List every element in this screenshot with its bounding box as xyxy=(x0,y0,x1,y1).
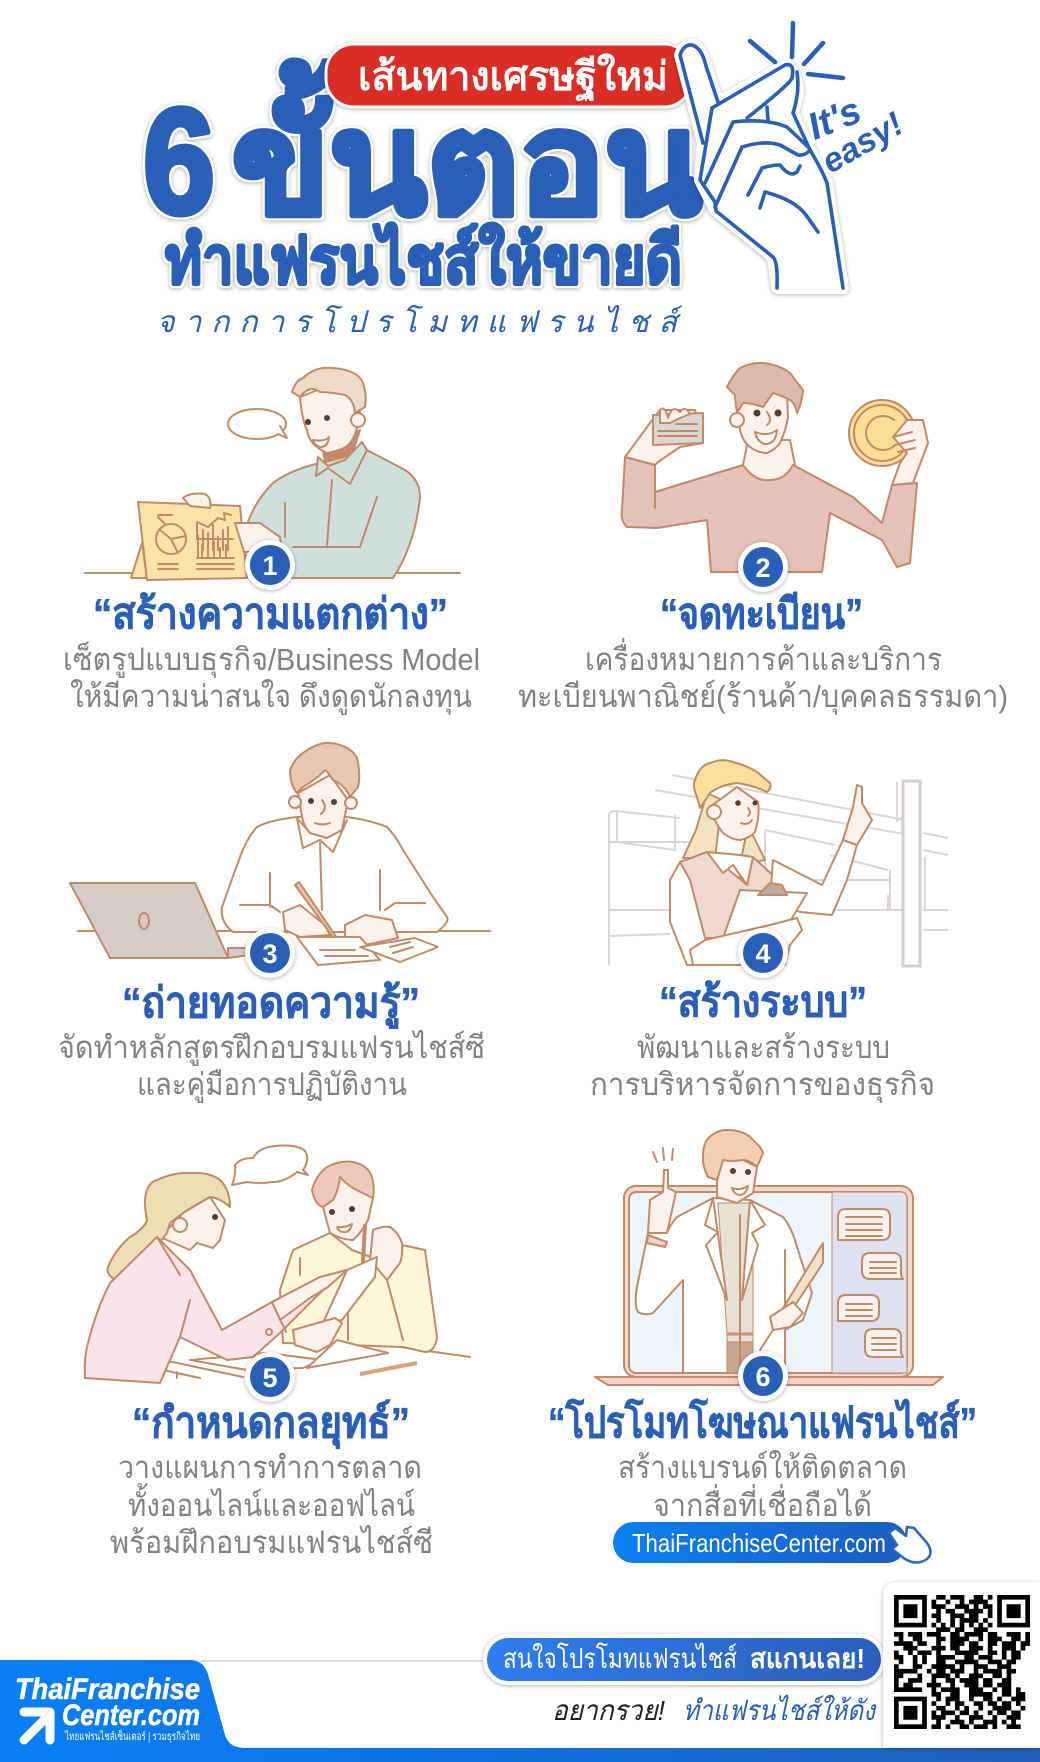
tagline xyxy=(552,1694,877,1726)
illustration: two people discussing xyxy=(85,1146,470,1383)
title: 6 ขั้นตอน: ขั้นตอน xyxy=(232,60,702,244)
description 6: สร้างแบรนด์ให้ติดตลาด xyxy=(618,1450,907,1485)
panel: step 5 xyxy=(85,1146,470,1560)
call to action pill: สแกนเลย! xyxy=(750,1643,865,1674)
description 4: พัฒนาและสร้างระบบ xyxy=(637,1030,890,1065)
number badge 1: 1 xyxy=(262,551,278,581)
description 4 xyxy=(590,1030,935,1104)
tagline: อยากรวย! xyxy=(552,1695,665,1726)
script line: จากการโปรโมทแฟรนไชส์: จากการโปรโมทแฟรนไชส์ xyxy=(157,304,683,339)
number badge 4: 4 xyxy=(755,939,771,969)
number badge 6: 6 xyxy=(755,1362,771,1392)
number badge 2 xyxy=(738,542,788,592)
footer bar with logo tab xyxy=(0,1660,1040,1762)
illustration: man with card and coin xyxy=(622,363,928,572)
red pill: เส้นทางเศรษฐีใหม่ xyxy=(326,44,692,107)
description 2 xyxy=(518,638,1008,716)
link button: ThaiFranchiseCenter.com xyxy=(613,1522,930,1563)
number badge 3: 3 xyxy=(262,939,278,969)
panel: step 3 xyxy=(58,743,490,1103)
call to action pill: สนใจโปรโมทแฟรนไชส์ xyxy=(503,1642,737,1674)
link button: ThaiFranchiseCenter.com: ThaiFranchiseCenter.com xyxy=(632,1528,886,1558)
logo text: ไทยแฟรนไชส์เซ็นเตอร์ | รวมธุรกิจไทย xyxy=(64,1729,200,1743)
description 4: การบริหารจัดการของธุรกิจ xyxy=(590,1067,935,1104)
title: 6 ขั้นตอน: 6 xyxy=(143,77,215,245)
header title block xyxy=(143,23,910,339)
number badge 6 xyxy=(738,1351,788,1401)
icon: snapping hand with It's easy: It's xyxy=(802,90,867,149)
number badge 4 xyxy=(738,928,788,978)
description 2: ทะเบียนพาณิชย์(ร้านค้า/บุคคลธรรมดา) xyxy=(518,679,1008,716)
illustration: man writing beside laptop xyxy=(70,743,490,965)
icon: logo arrow xyxy=(24,1712,50,1740)
heading 3: “ถ่ายทอดความรู้” xyxy=(122,979,420,1029)
logo text: ThaiFranchise xyxy=(15,1673,200,1706)
heading 2: “จดทะเบียน” xyxy=(660,590,863,637)
QR code xyxy=(894,1595,1030,1729)
number badge 3 xyxy=(245,928,295,978)
illustration: man presenting chart xyxy=(85,368,460,580)
description 2: เครื่องหมายการค้าและบริการ xyxy=(585,638,942,677)
panel: step 1 xyxy=(63,368,480,716)
description 3 xyxy=(58,1030,485,1103)
description 5 xyxy=(110,1450,433,1560)
description 1: ให้มีความน่าสนใจ ดึงดูดนักลงทุน xyxy=(70,679,472,716)
description 5: วางแผนการทำการตลาด xyxy=(118,1450,422,1485)
heading 1: “สร้างความแตกต่าง” xyxy=(93,590,448,637)
illustration: presenter in front of laptop xyxy=(595,1130,943,1385)
icon: snapping hand with It's easy xyxy=(680,23,910,288)
tagline: ทำแฟรนไชส์ให้ดัง xyxy=(683,1694,877,1726)
description 6: จากสื่อที่เชื่อถือได้ xyxy=(653,1484,872,1523)
number badge 1 xyxy=(245,540,295,590)
heading 5: “กำหนดกลยุทธ์” xyxy=(132,1399,410,1449)
description 5: พร้อมฝึกอบรมแฟรนไชส์ซี xyxy=(110,1525,433,1560)
red pill: เส้นทางเศรษฐีใหม่: เส้นทางเศรษฐีใหม่ xyxy=(358,53,668,103)
number badge 5: 5 xyxy=(262,1363,278,1393)
number badge 2: 2 xyxy=(755,553,771,583)
description 1 xyxy=(63,641,480,716)
icon: pointing hand cursor xyxy=(889,1527,930,1562)
illustration: woman in helmet with clipboard xyxy=(609,760,948,966)
heading 4: “สร้างระบบ” xyxy=(659,978,867,1025)
panel: step 2 xyxy=(518,363,1008,716)
logo text xyxy=(15,1673,200,1743)
QR card xyxy=(883,1582,1040,1748)
description 6 xyxy=(618,1450,907,1523)
icon: snapping hand with It's easy: easy! xyxy=(815,105,910,181)
description 3: และคู่มือการปฏิบัติงาน xyxy=(137,1067,407,1103)
panel: step 6 xyxy=(548,1130,977,1563)
panel: step 4 xyxy=(590,760,948,1104)
number badge 5 xyxy=(245,1352,295,1402)
description 5: ทั้งออนไลน์และออฟไลน์ xyxy=(128,1483,415,1523)
subtitle: ทำแฟรนไชส์ให้ขายดี: ทำแฟรนไชส์ให้ขายดี xyxy=(165,221,682,297)
logo text: Center.com xyxy=(62,1699,200,1732)
description 1: เซ็ตรูปแบบธุรกิจ/Business Model xyxy=(63,641,480,679)
description 3: จัดทำหลักสูตรฝึกอบรมแฟรนไชส์ซี xyxy=(58,1030,485,1066)
call to action pill xyxy=(485,1636,883,1683)
